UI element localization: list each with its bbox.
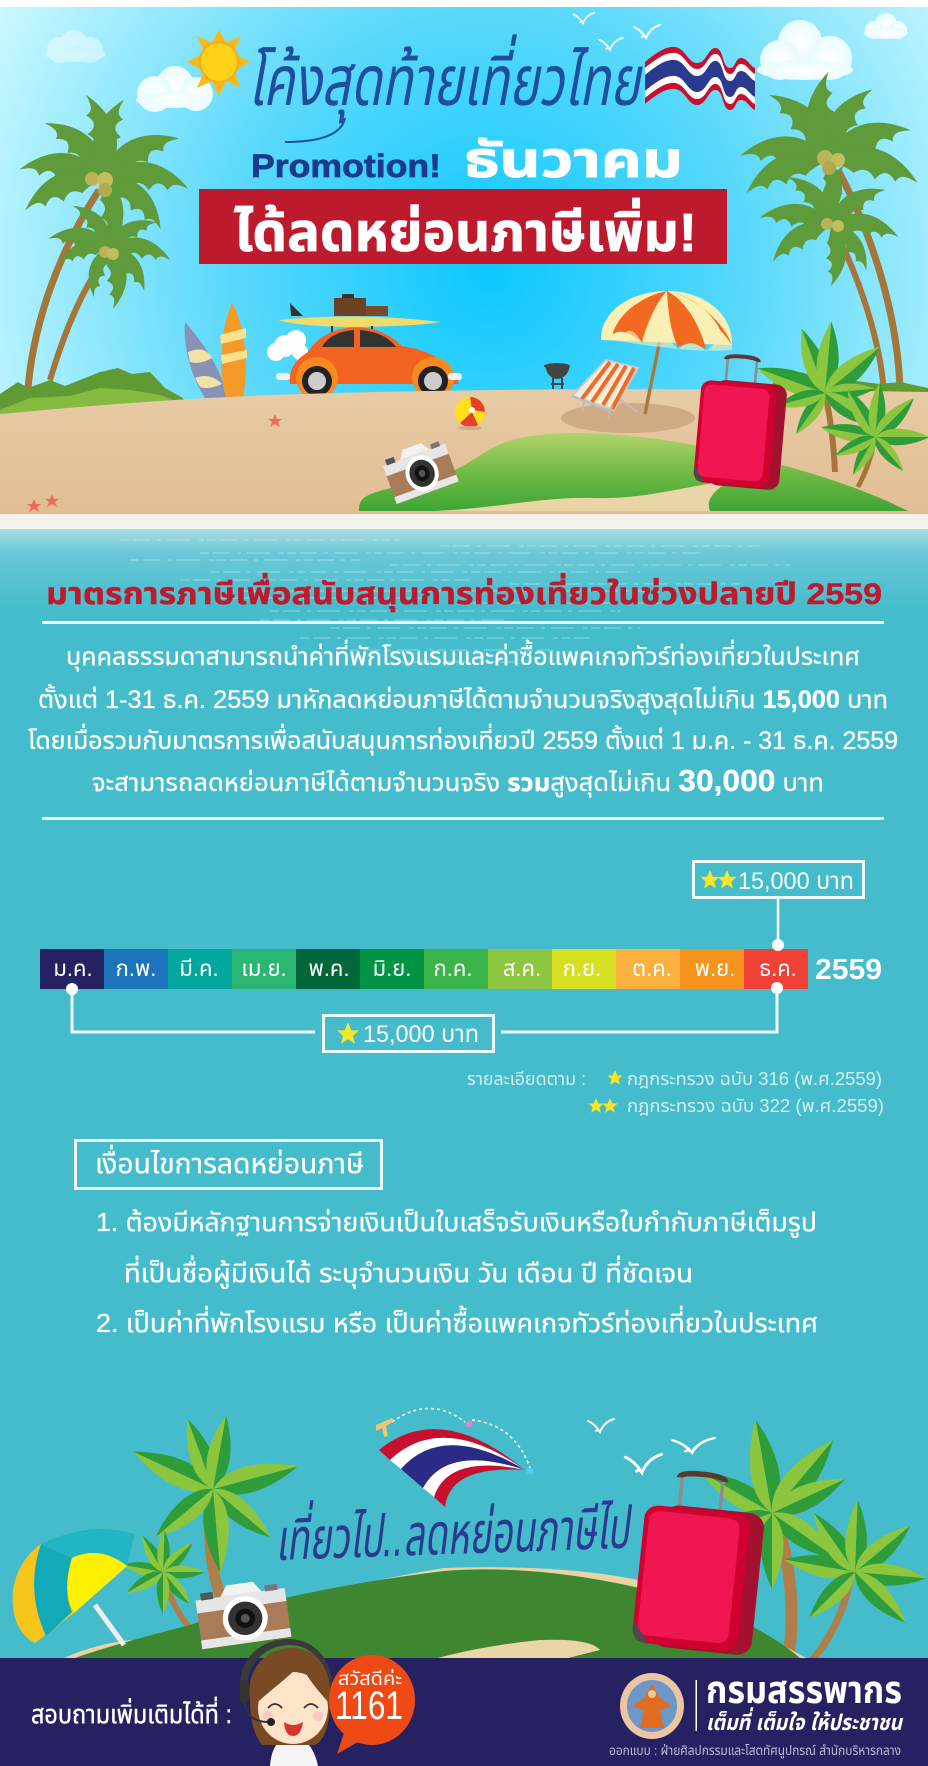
legend: ministerial regulations [467,1069,884,1116]
flag: curved Thai flag [376,1408,534,1507]
starfish [27,414,282,512]
chart: month timeline: ก.ค. [434,956,472,981]
icon: sun [187,30,250,96]
legend: ministerial regulations: กฎกระทรวง ฉบับ 322 (พ.ศ.2559) [627,1096,884,1116]
camera [194,1577,291,1649]
title: script headline: โค้งสุดท้ายเที่ยวไทย [248,34,643,124]
palm: left large [128,1413,301,1600]
suitcase [631,1469,769,1657]
icon: call-center character [240,1639,332,1766]
bottom scene: island illustration [13,1408,928,1660]
car [267,294,462,399]
text block: measure description: บุคคลธรรมดาสามารถนำค่าที่พักโรงแรมและค่าซื้อแพคเกจทัวร์ท่องเที่ยวในประเทศ [66,639,860,672]
flag: waving Thai flag [645,47,755,110]
palm: right [738,72,923,392]
slogan: Revenue Department: เต็มที่ เต็มใจ ให้ประชาชน [706,1707,904,1735]
legend: ministerial regulations: กฎกระทรวง ฉบับ 316 (พ.ศ.2559) [627,1069,882,1089]
text block: measure description [28,639,898,798]
palm: left small [121,1530,205,1630]
suitcase [693,353,790,491]
text block: measure description: จะสามารถลดหย่อนภาษีได้ตามจำนวนจริง รวมสูงสุดไม่เกิน 30,000 บาท [92,763,824,798]
callout: January to December 15,000: 15,000 บาท [363,1021,479,1048]
water surface [0,514,928,668]
green hill [60,1567,810,1660]
clouds [45,13,908,112]
callout: December 15,000 [694,862,864,951]
callout: 1161 speech bubble: 1161 [335,1684,403,1728]
slogan: script text: เที่ยวไป..ลดหย่อนภาษีไป [274,1489,635,1573]
list: conditions: ที่เป็นชื่อผู้มีเงินได้ ระบุจำนวนเงิน วัน เดือน ปี ที่ชัดเจน [124,1255,693,1289]
camera [380,435,459,504]
beach ball [455,397,485,430]
umbrella shadow [561,403,695,433]
logo text: Revenue Department: กรมสรรพากร [706,1670,902,1712]
chart: month timeline: ก.ย. [563,956,601,981]
birds [573,13,660,50]
heading: December: ธันวาคม [464,132,683,188]
chart: month timeline: พ.ค. [308,956,350,981]
heading: conditions box [76,1140,382,1188]
beach umbrella [601,291,732,414]
footer: inquiry label: สอบถามเพิ่มเติมได้ที่ : [31,1696,232,1729]
chart: month timeline: ส.ค. [503,956,541,981]
palms: right [696,1417,928,1660]
list: conditions: 1. ต้องมีหลักฐานการจ่ายเงินเป็นใบเสร็จรับเงินหรือใบกำกับภาษีเต็มรูป [96,1207,817,1238]
section heading: มาตรการภาษีเพื่อสนับสนุนการท่องเที่ยวในช่วงปลายปี 2559 [46,572,882,612]
credit line: ออกแบบ : ฝ่ายศิลปกรรมและโสตทัศนูปกรณ์ สำนักบริหารกลาง [609,1743,901,1758]
chart: month timeline: มิ.ย. [373,956,411,981]
banner: extra tax deduction [199,189,727,264]
chart: month timeline: ก.พ. [116,956,156,981]
list: conditions [96,1207,818,1338]
palm: left [18,91,190,388]
year label: 2559 [815,954,882,986]
small palms: right [754,320,928,487]
heading: conditions box: เงื่อนไขการลดหย่อนภาษี [95,1144,364,1179]
callout: 1161 speech bubble: สวัสดีค่ะ [338,1667,402,1690]
callout: January to December 15,000 [66,982,783,1052]
chart: month timeline: เม.ย. [241,956,287,981]
text block: measure description: โดยเมื่อรวมกับมาตรการเพื่อสนับสนุนการท่องเที่ยวปี 2559 ตั้งแต่ 1 ม.ค. - 31 ธ.ค. 2559 [28,723,898,756]
sand [0,389,928,518]
callout: December 15,000: 15,000 บาท [738,868,854,895]
beach umbrella [13,1529,135,1645]
chart: month timeline: ม.ค. [53,956,93,981]
top scene: beach illustration [0,0,928,518]
chart: month timeline: ธ.ค. [759,956,797,981]
chart: month timeline: ต.ค. [632,956,672,981]
title: script headline [248,34,643,142]
icon: Revenue Department seal [620,1673,684,1739]
footer bar [0,1639,928,1766]
heading: Promotion: Promotion! [251,148,441,184]
chart: month timeline: พ.ย. [695,956,735,981]
bushes [0,368,928,416]
beach chair and barbecue [544,360,638,418]
birds [588,1419,714,1473]
green hill [359,433,908,511]
chart: month timeline: มี.ค. [179,956,219,981]
banner: extra tax deduction: ได้ลดหย่อนภาษีเพิ่ม! [234,198,697,263]
callout: 1161 speech bubble [329,1655,415,1754]
text block: measure description: ตั้งแต่ 1-31 ธ.ค. 2559 มาหักลดหย่อนภาษีได้ตามจำนวนจริงสูงสุดไม่เกิน 15,000 บาท [38,683,888,715]
legend: ministerial regulations: รายละเอียดตาม : [467,1069,586,1089]
list: conditions: 2. เป็นค่าที่พักโรงแรม หรือ เป็นค่าซื้อแพคเกจทัวร์ท่องเที่ยวในประเทศ [96,1305,818,1338]
chart: month timeline [40,949,882,989]
surfboards [185,303,247,398]
